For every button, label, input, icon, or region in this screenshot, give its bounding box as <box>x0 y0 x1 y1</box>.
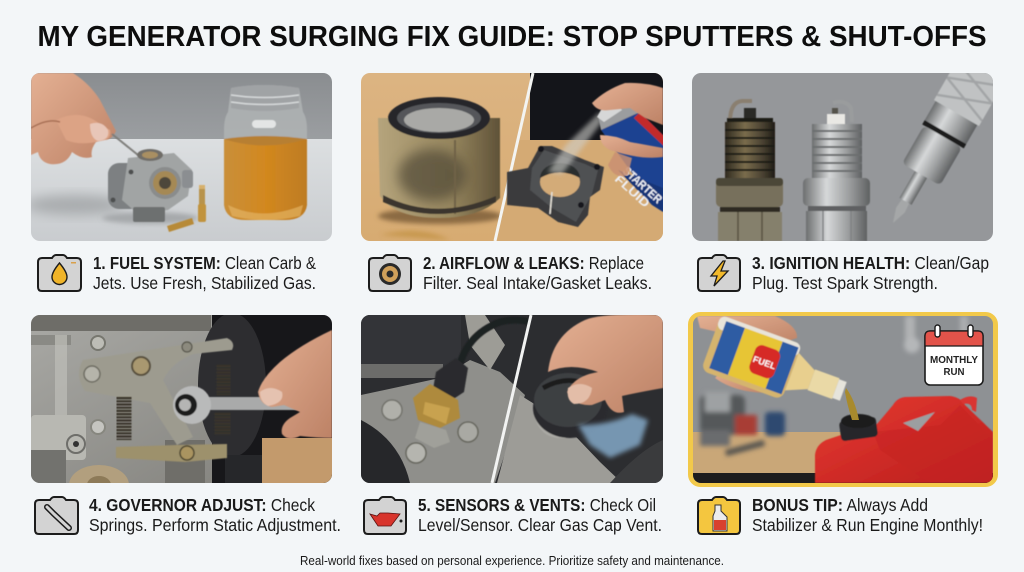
icon: stabilizer bottle <box>698 497 740 534</box>
icon: dirty spark plug <box>716 101 783 241</box>
panel: airflow caption <box>369 253 652 293</box>
panel: bonus tip caption <box>698 495 983 535</box>
icon: hand holding wire <box>31 73 138 164</box>
panel: sensors and vents photo <box>361 315 663 483</box>
icon: lightning bolt <box>698 255 740 291</box>
icon: filter aperture <box>369 255 411 291</box>
icon: red fuel can <box>815 396 993 483</box>
icon: oil can <box>364 497 406 534</box>
panel: fuel system photo <box>25 73 332 241</box>
title: MY GENERATOR SURGING FIX GUIDE: STOP SPUTTERS & SHUT-OFFS <box>38 21 986 53</box>
icon: spray can <box>596 107 663 212</box>
icon: wrench <box>172 386 298 424</box>
spray mist <box>548 112 602 174</box>
icon: jar of fuel <box>224 85 307 220</box>
icon: spray can: STARTER <box>620 164 665 207</box>
icon: brass jets <box>167 185 206 232</box>
panel: ignition health photo <box>692 73 993 241</box>
icon: spray can: FLUID <box>612 172 653 211</box>
caption text: 3. IGNITION HEALTH: Clean/Gap <box>752 253 989 273</box>
icon: governor linkage arm <box>79 338 233 462</box>
caption text: 4. GOVERNOR ADJUST: Check <box>89 495 315 515</box>
panel: governor caption: Springs. Perform Static Adjustment. <box>89 515 341 535</box>
icon: intake gasket <box>507 146 604 227</box>
icon: monthly run calendar: MONTHLY <box>930 354 978 366</box>
panel: governor caption <box>35 495 341 535</box>
icon: monthly run calendar <box>925 325 983 385</box>
icon: hand on cap <box>548 315 663 413</box>
icon: monthly run calendar: RUN <box>944 366 964 378</box>
panel: ignition caption <box>698 253 989 293</box>
footer note: Real-world fixes based on personal experience. Prioritize safety and maintenance. <box>300 554 724 568</box>
icon: springs <box>122 365 225 440</box>
panel: fuel system caption: Jets. Use Fresh, Stabilized Gas. <box>93 273 316 293</box>
icon: fuel drop <box>38 255 81 291</box>
icon: clean spark plug <box>803 102 870 241</box>
icon: spark tester tool <box>894 73 993 222</box>
panel: ignition caption: Plug. Test Spark Strength. <box>752 273 938 293</box>
icon: gas cap <box>533 373 607 438</box>
icon: oil pressure sensor <box>382 320 530 463</box>
caption text: 5. SENSORS & VENTS: Check Oil <box>418 495 656 515</box>
icon: hand on wrench <box>258 330 332 439</box>
icon: hand on can <box>592 83 663 176</box>
icon: air filter <box>378 97 500 218</box>
panel: bonus tip caption: Stabilizer & Run Engine Monthly! <box>752 515 983 535</box>
panel: sensors caption: Level/Sensor. Clear Gas Cap Vent. <box>418 515 662 535</box>
panel: sensors caption <box>364 495 662 535</box>
caption text: 2. AIRFLOW & LEAKS: Replace <box>423 253 644 273</box>
caption text: 1. FUEL SYSTEM: Clean Carb & <box>93 253 316 273</box>
panel: fuel system caption <box>38 253 316 293</box>
icon: hand and stabilizer bottle: FUEL <box>752 354 778 372</box>
icon: vent air <box>578 414 648 458</box>
panel: governor adjust photo <box>31 315 332 483</box>
panel: airflow and leaks photo <box>361 73 668 241</box>
divider <box>492 315 531 483</box>
panel: bonus tip photo <box>690 314 996 486</box>
divider <box>495 73 533 241</box>
icon: carburetor <box>102 149 198 224</box>
fuel stream <box>845 388 859 420</box>
panel: airflow caption: Filter. Seal Intake/Gasket Leaks. <box>423 273 652 293</box>
caption text: BONUS TIP: Always Add <box>752 495 928 515</box>
icon: hand and stabilizer bottle <box>696 316 847 401</box>
icon: wrench <box>35 497 78 534</box>
